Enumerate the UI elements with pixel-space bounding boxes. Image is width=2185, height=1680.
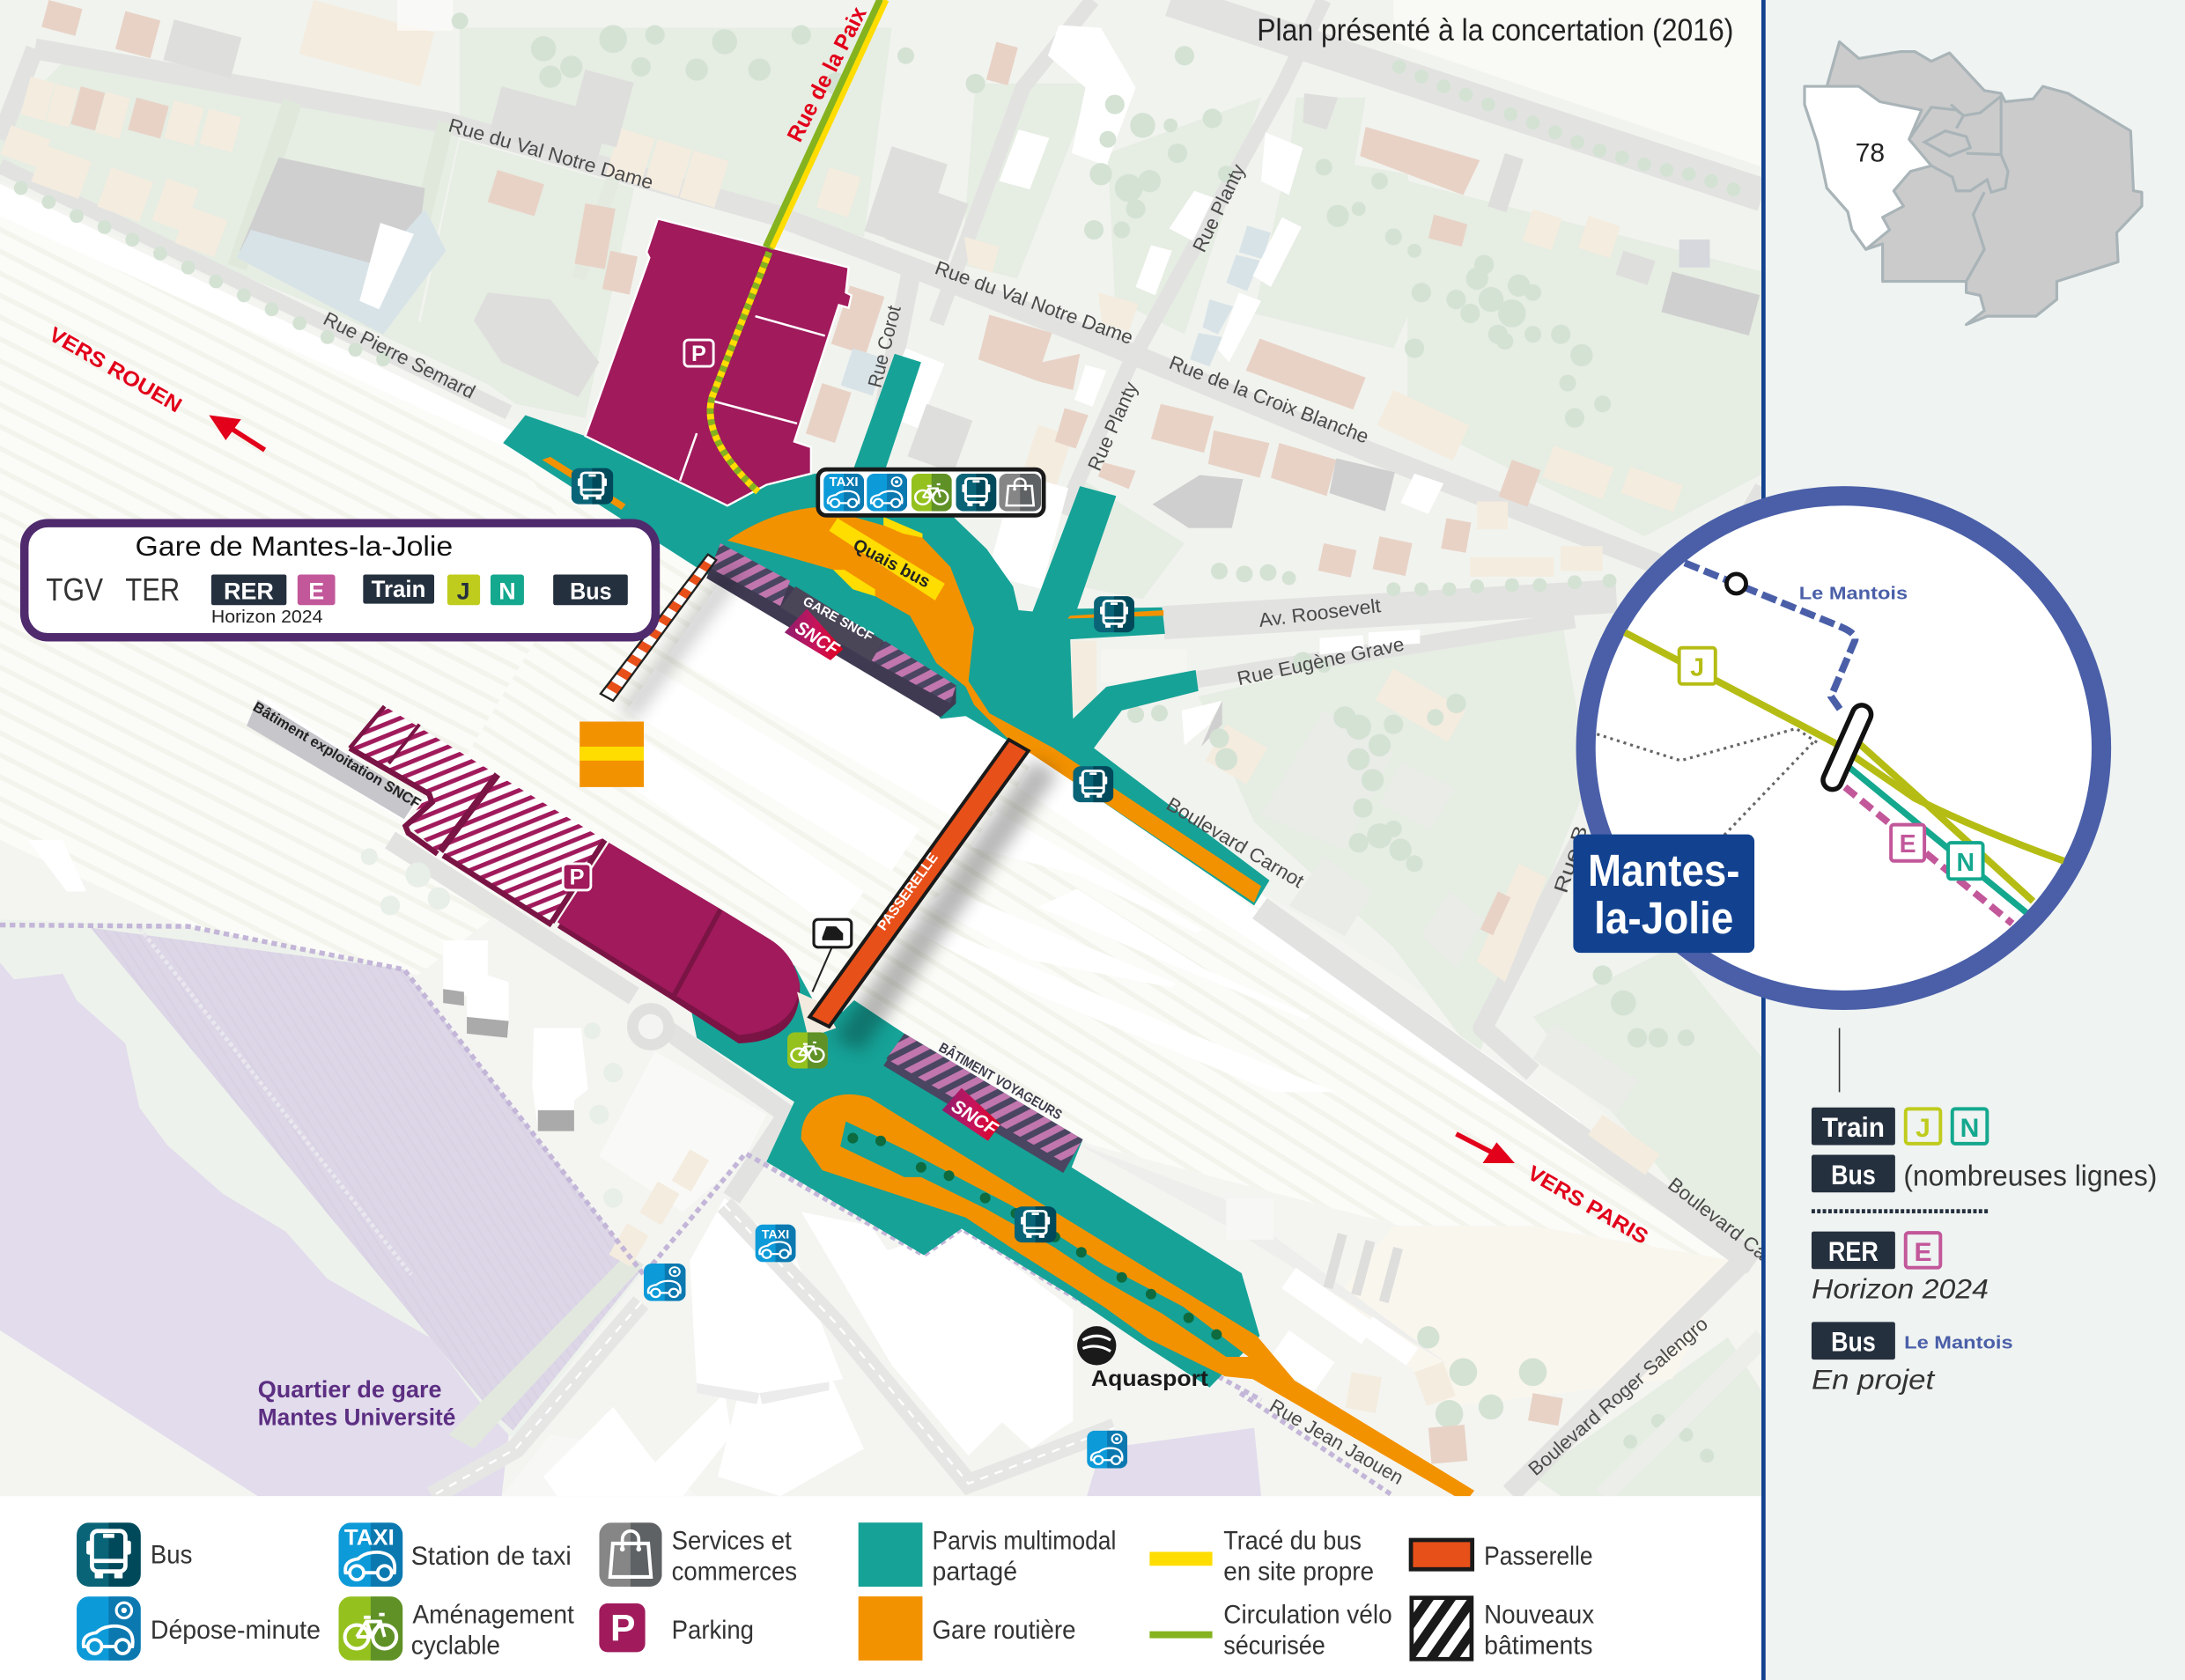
- label: quartier de gare: Quartier de gare: [258, 1376, 442, 1403]
- legend: TAXI: [344, 1527, 395, 1551]
- street labels: Rue Pierre Semard: [320, 307, 479, 403]
- station name plate: la-Jolie: [1594, 893, 1733, 943]
- panel: gare de Mantes-la-Jolie: TGV: [46, 571, 104, 608]
- gare SNCF building north: GARE SNCF: [801, 593, 875, 645]
- heading: plan présenté: Plan présenté à la concertation (2016): [1257, 13, 1733, 48]
- side legend: lines: Horizon 2024: [1812, 1273, 1989, 1305]
- panel: gare de Mantes-la-Jolie: N: [498, 578, 516, 604]
- logo SNCF south: SNCF: [948, 1095, 1002, 1140]
- legend: Circulation vélo: [1223, 1601, 1392, 1630]
- parvis multimodal north: [503, 354, 1269, 905]
- quais bus: [829, 517, 945, 601]
- quais bus: Quais bus: [850, 535, 934, 592]
- inset: schematic network: J: [1690, 653, 1704, 682]
- side legend: lines: Le Mantois: [1904, 1332, 2013, 1352]
- sidebar background: [1763, 0, 2185, 1680]
- legend: commerces: [672, 1558, 797, 1587]
- map base: streets, buildings, vegetation, rail yard: [0, 0, 1763, 1496]
- legend: Gare routière: [933, 1616, 1076, 1645]
- legend: Tracé du bus: [1223, 1527, 1362, 1556]
- street labels: Rue du Val Notre Dame: [932, 256, 1136, 349]
- bus bay block: [579, 722, 644, 787]
- side legend: lines: Bus: [1831, 1159, 1876, 1190]
- legend: Aménagement: [412, 1601, 574, 1630]
- street labels: Av. Roosevelt: [1258, 594, 1382, 631]
- label: quartier de gare: Mantes Université: [258, 1404, 455, 1430]
- logo SNCF north: [785, 608, 844, 660]
- arrow: vers Paris: [1456, 1134, 1515, 1163]
- street labels: Rue de la Croix Blanche: [1166, 351, 1372, 448]
- legend: en site propre: [1223, 1558, 1374, 1587]
- north-west buildings: [1, 0, 1073, 589]
- legend: Parking: [672, 1616, 754, 1645]
- legend: Nouveaux: [1484, 1601, 1594, 1630]
- street labels: Rue Jean Jaouen: [1266, 1395, 1407, 1489]
- street labels: Rue Planty: [1188, 160, 1250, 255]
- side legend: lines: En projet: [1812, 1363, 1936, 1395]
- side legend: lines: RER: [1828, 1235, 1879, 1267]
- icon: bus west: [572, 468, 613, 505]
- panel: gare de Mantes-la-Jolie: Horizon 2024: [211, 607, 322, 627]
- aquasport: Aquasport: [1091, 1367, 1208, 1391]
- legend: Passerelle: [1484, 1542, 1593, 1571]
- parking south: P: [570, 866, 585, 890]
- street labels: Rue Eugène Grave: [1235, 633, 1406, 689]
- gare routière south: [801, 1094, 1474, 1496]
- legend: sécurisée: [1223, 1631, 1325, 1660]
- parking north: [586, 218, 852, 505]
- panel: gare de Mantes-la-Jolie: Train: [372, 576, 425, 602]
- station name plate: [1573, 835, 1754, 953]
- panel: gare de Mantes-la-Jolie: J: [457, 578, 470, 604]
- panel: gare de Mantes-la-Jolie: E: [308, 578, 324, 604]
- quarter boundary dotted line: [0, 925, 1393, 1496]
- icon: bus east: [1094, 596, 1134, 632]
- side legend: lines: E: [1915, 1238, 1932, 1267]
- panel: gare de Mantes-la-Jolie: RER: [224, 578, 274, 604]
- legend: [77, 1522, 1594, 1661]
- icon group: services at north parvis: [818, 469, 1044, 515]
- icon: bus Carnot: [1073, 766, 1113, 802]
- side legend: lines: Bus: [1831, 1326, 1876, 1358]
- leader line: [1839, 1028, 1841, 1092]
- side legend: lines: N: [1960, 1114, 1979, 1143]
- side legend: lines: (nombreuses lignes): [1903, 1160, 2157, 1192]
- street labels: Boulevard Carnot: [1163, 792, 1308, 892]
- inset: schematic network: N: [1957, 849, 1975, 877]
- label: vers Paris: VERS PARIS: [1524, 1162, 1652, 1249]
- locator map: [1805, 41, 2142, 325]
- legend: bâtiments: [1484, 1631, 1593, 1660]
- icon: dépose-minute south: [1087, 1431, 1127, 1469]
- icon: taxi: TAXI: [762, 1227, 789, 1242]
- panel: gare de Mantes-la-Jolie: [25, 523, 655, 637]
- title: Rue de la Paix: Rue de la Paix: [783, 4, 872, 146]
- parking north: P: [691, 342, 706, 366]
- street labels: Rue Corot: [864, 303, 905, 390]
- south buildings: [432, 940, 1763, 1496]
- street labels: Boulevard Ca: [1664, 1173, 1772, 1264]
- sign: stop: [812, 919, 852, 991]
- icon: bus south: [1015, 1206, 1056, 1242]
- street labels: Rue B: [1549, 822, 1592, 895]
- legend: Services et: [672, 1527, 792, 1556]
- inset: schematic network: Le Mantois: [1799, 583, 1908, 603]
- inset: schematic network: [1586, 496, 2101, 1000]
- label: vers Rouen: VERS ROUEN: [45, 323, 185, 417]
- legend: Parvis multimodal: [933, 1527, 1116, 1556]
- street labels: [320, 114, 1772, 1489]
- logo SNCF north: SNCF: [792, 617, 844, 660]
- street labels: Rue du Val Notre Dame: [447, 114, 656, 194]
- icon: bike south: [787, 1032, 828, 1068]
- side legend: lines: [1812, 1108, 2157, 1395]
- side legend: lines: J: [1916, 1114, 1930, 1143]
- station name plate: Mantes-: [1588, 845, 1739, 895]
- panel: gare de Mantes-la-Jolie: TER: [125, 571, 180, 608]
- bus route Rue de la Paix: [710, 0, 886, 491]
- bâtiment voyageurs: [883, 1034, 1082, 1173]
- panel: gare de Mantes-la-Jolie: Bus: [570, 578, 612, 604]
- legend background: [0, 1496, 1763, 1680]
- street labels: Rue Planty: [1083, 378, 1142, 474]
- parvis multimodal south: [690, 965, 1259, 1388]
- streets: [0, 0, 1763, 1493]
- bâtiment exploitation SNCF: Bâtiment exploitation SNCF: [250, 698, 424, 812]
- south district: lilac quarter: [0, 919, 1261, 1496]
- rail yard: [0, 209, 1733, 1264]
- label: quartier de gare: [258, 1376, 455, 1430]
- bus bay orange strips: [543, 457, 1163, 618]
- trees on the island: [847, 1133, 1222, 1340]
- legend: P: [610, 1608, 636, 1650]
- side legend: lines: Train: [1822, 1111, 1885, 1143]
- passerelle: [797, 740, 1059, 1051]
- icon: dépose-minute west: [644, 1264, 685, 1301]
- legend: partagé: [933, 1558, 1017, 1587]
- bâtiment voyageurs: BÂTIMENT VOYAGEURS: [936, 1039, 1065, 1123]
- divider: blue vertical rule: [1761, 0, 1766, 1680]
- legend: Station de taxi: [411, 1542, 572, 1571]
- legend: cyclable: [411, 1631, 500, 1660]
- central and north-east buildings: [964, 25, 1760, 1175]
- green plots: [0, 28, 1763, 1496]
- parking south: [557, 843, 800, 1043]
- legend: Dépose-minute: [151, 1616, 321, 1645]
- icon group: services at north parvis: TAXI: [830, 475, 859, 490]
- inset: schematic network: E: [1900, 830, 1916, 858]
- gare routière north: [727, 507, 1261, 903]
- gare SNCF building north: [706, 543, 956, 718]
- panel: gare de Mantes-la-Jolie: Gare de Mantes-la-Jolie: [135, 530, 453, 562]
- icon: taxi: [756, 1225, 795, 1262]
- trees: [14, 12, 1740, 1463]
- locator map: 78: [1856, 139, 1885, 168]
- arrow: vers Rouen: [209, 415, 265, 450]
- legend: Bus: [151, 1541, 192, 1570]
- nouveaux bâtiments parking south: [350, 706, 605, 925]
- aquasport: [1077, 1326, 1208, 1391]
- future footbridge: [601, 555, 744, 720]
- street labels: Boulevard Roger Salengro: [1524, 1313, 1712, 1480]
- passerelle: PASSERELLE: [875, 851, 941, 933]
